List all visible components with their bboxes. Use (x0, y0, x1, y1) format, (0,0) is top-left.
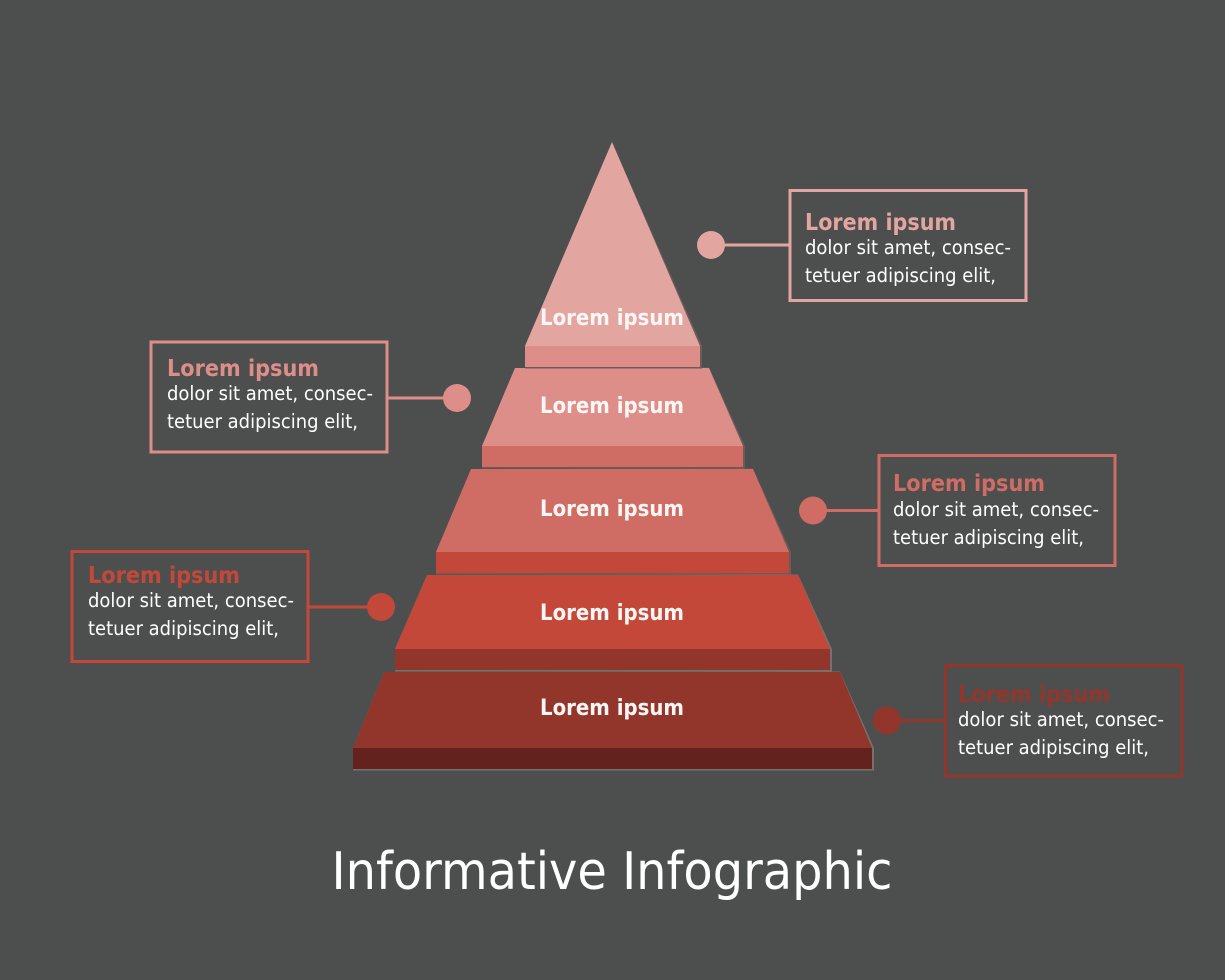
connector and dot (697, 231, 790, 259)
heading: Lorem ipsum (958, 682, 1110, 708)
pyramid tier 2 (482, 368, 745, 468)
callout 4 (72, 552, 395, 662)
body text: tetuer adipiscing elit, (88, 617, 279, 640)
body text: tetuer adipiscing elit, (893, 526, 1084, 549)
box (151, 342, 387, 452)
box (946, 666, 1182, 776)
heading: Lorem ipsum (167, 356, 319, 382)
connector and dot (308, 593, 395, 621)
heading: Lorem ipsum (805, 210, 956, 236)
label: Lorem ipsum (540, 696, 684, 721)
pyramid tier 1 (525, 142, 702, 368)
label: Lorem ipsum (540, 394, 684, 419)
label: Lorem ipsum (540, 601, 684, 626)
box (879, 456, 1115, 566)
connector and dot (799, 496, 879, 524)
heading: Lorem ipsum (893, 471, 1045, 497)
body text: dolor sit amet, consec- (893, 498, 1099, 521)
heading: Lorem ipsum (88, 563, 240, 589)
connector and dot (387, 384, 471, 412)
callout 3 (799, 456, 1115, 566)
body text: dolor sit amet, consec- (88, 589, 294, 612)
body text: dolor sit amet, consec- (167, 382, 373, 405)
body text: dolor sit amet, consec- (958, 708, 1164, 731)
pyramid tier 5 (353, 672, 874, 770)
pyramid tier 4 (395, 574, 832, 672)
callout 5 (873, 666, 1182, 776)
pyramid tier 3 (436, 468, 791, 574)
title: Informative Infographic (332, 842, 892, 902)
callout 1 (697, 190, 1026, 300)
callout 2 (151, 342, 471, 452)
connector and dot (873, 706, 945, 734)
label: Lorem ipsum (540, 306, 684, 331)
box (790, 190, 1026, 300)
body text: tetuer adipiscing elit, (958, 736, 1149, 759)
pyramid (353, 142, 874, 770)
body text: tetuer adipiscing elit, (167, 410, 358, 433)
box (72, 552, 308, 662)
body text: tetuer adipiscing elit, (805, 264, 996, 287)
label: Lorem ipsum (540, 497, 684, 522)
body text: dolor sit amet, consec- (805, 236, 1011, 259)
